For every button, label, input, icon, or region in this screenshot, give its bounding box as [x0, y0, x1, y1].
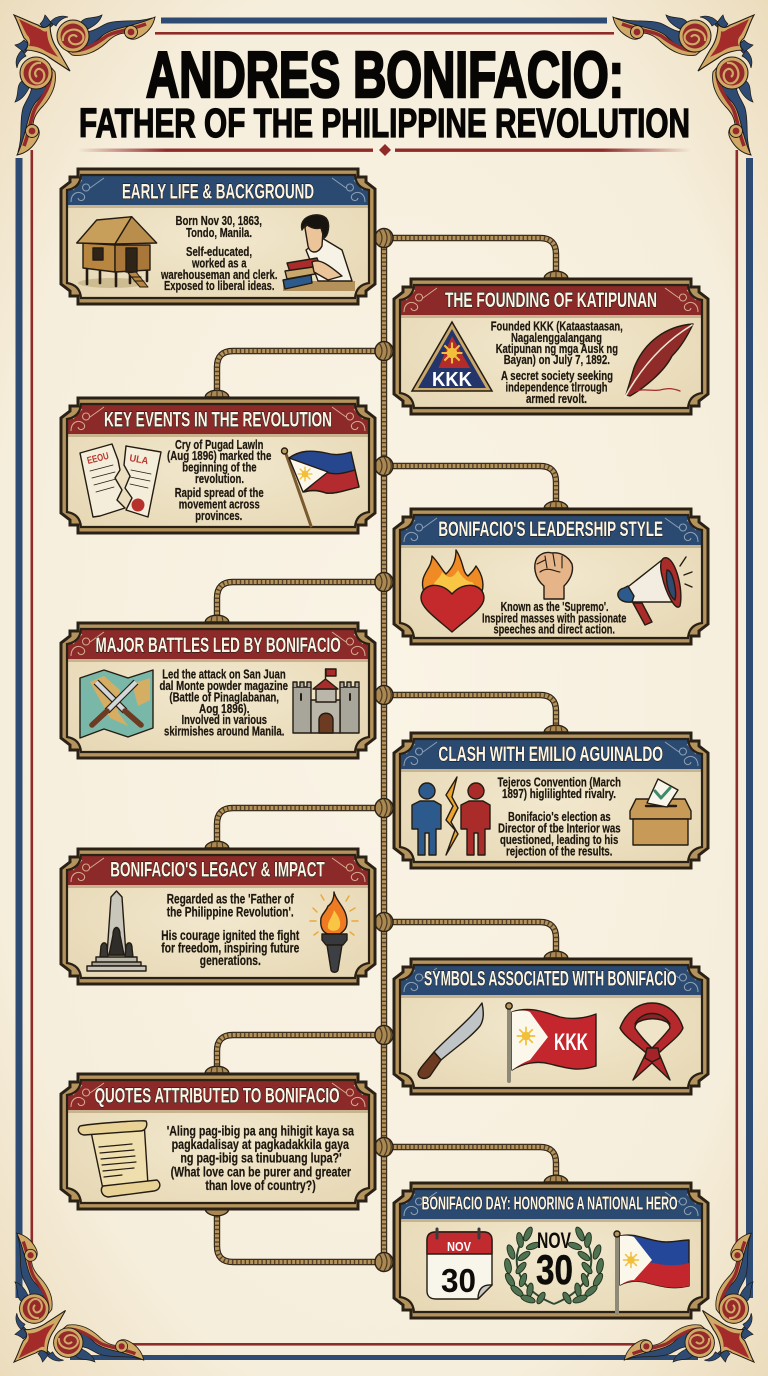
icon: quill feather: [625, 324, 693, 397]
text: founding of Katipunan: Bayan) on July 7, 1892.: [504, 353, 610, 367]
corner ornament: top left: [14, 15, 155, 155]
icon: torch: [310, 892, 358, 972]
panel: Bonifacio Day: [393, 1182, 709, 1318]
icon: map with crossed knives: [80, 670, 153, 738]
text: quote: ng pag-ibig sa tinubuang lupa?': [180, 1151, 342, 1166]
icon: nipa hut: [77, 217, 157, 288]
text: clash with Aguinaldo: Bonifacio's election as: [508, 810, 611, 824]
heading: founding of Katipunan: THE FOUNDING OF KATIPUNAN: [445, 288, 657, 312]
text: legacy and impact: for freedom, inspiring future: [161, 941, 300, 956]
corner ornament: bottom right: [624, 1233, 754, 1362]
text: legacy and impact: the Philippine Revolution'.: [167, 904, 294, 919]
text: early life: Exposed to liberal ideas.: [164, 279, 274, 293]
heading: key events: KEY EVENTS IN THE REVOLUTION: [104, 408, 332, 432]
text: legacy and impact: generations.: [200, 953, 261, 968]
text: clash with Aguinaldo: Tejeros Convention (March: [498, 776, 621, 790]
icon: torn document: EEOU: [86, 451, 110, 467]
heading: quotes: QUOTES ATTRIBUTED TO BONIFACIO: [95, 1084, 340, 1108]
icon: bolo knife: [418, 1003, 483, 1078]
icon: KKK triangle: [412, 322, 492, 391]
text: key events: provinces.: [195, 509, 242, 523]
icon: calendar: [427, 1229, 492, 1299]
icon: flaming heart: [421, 550, 484, 632]
text: clash with Aguinaldo: questioned, leading to his: [500, 833, 618, 847]
text: major battles: skirmishes around Manila.: [164, 725, 284, 739]
text: early life: Tondo, Manila.: [186, 226, 252, 240]
icon: raised fist: [535, 553, 573, 599]
text: early life: worked as a: [191, 256, 247, 270]
corner ornament: bottom left: [14, 1233, 144, 1362]
text: founding of Katipunan: A secret society seeking: [501, 369, 613, 383]
text: founding of Katipunan: Nagalenggalangang: [511, 331, 602, 345]
title: [79, 38, 690, 146]
text: clash with Aguinaldo: 1897) higlilighted rivalry.: [502, 787, 616, 801]
icon: two rivals with lightning: [412, 777, 490, 855]
text: legacy and impact: His courage ignited the fight: [161, 928, 300, 943]
icon: castle: [293, 669, 359, 733]
text: major battles: (Battle of Pinaglabanan,: [169, 691, 279, 705]
icon: laurel wreath: [503, 1226, 605, 1305]
panel: early life: [60, 168, 376, 304]
icon: KKK flag: KKK: [554, 1029, 588, 1056]
text: leadership style: speeches and direct action.: [494, 623, 615, 637]
text: major battles: dal Monte powder magazine: [160, 679, 288, 693]
icon: megaphone: [618, 557, 692, 625]
icon: man reading: [283, 215, 355, 291]
icon: KKK flag: [506, 1003, 596, 1081]
text: founding of Katipunan: Katipunan ng mga Ausk ng: [496, 342, 618, 356]
icon: calendar: 30: [441, 1262, 476, 1299]
icon: torn document: ULA: [128, 453, 149, 467]
panel: quotes: [60, 1073, 376, 1209]
panel: founding of Katipunan: [393, 278, 709, 414]
text: leadership style: [482, 600, 626, 637]
text: leadership style: Known as the 'Supremo'.: [501, 600, 609, 614]
text: key events: beginning of the: [182, 460, 257, 474]
text: quote: 'Aling pag-ibig pa ang hihigit kaya sa: [167, 1124, 354, 1139]
icon: parchment scroll: [78, 1121, 160, 1197]
heading: major battles: MAJOR BATTLES LED BY BONIFACIO: [96, 633, 341, 657]
text: quote: [167, 1124, 354, 1193]
text: major battles: [160, 667, 288, 739]
icon: Philippine flag on pole: [614, 1231, 689, 1313]
text: key events: revolution.: [195, 472, 244, 486]
icon: red neckerchief: [620, 1003, 683, 1080]
heading: legacy and impact: BONIFACIO'S LEGACY & IMPACT: [110, 858, 325, 882]
text: quote: pagkadalisay at pagkadakkila gaya: [172, 1137, 349, 1152]
icon: Philippine flag: [282, 448, 359, 526]
icon: calendar: NOV: [447, 1239, 471, 1254]
icon: Bonifacio monument: [87, 891, 146, 971]
panel: leadership style: [393, 508, 709, 644]
text: key events: Cry of Pugad Lawln: [175, 438, 263, 452]
text: clash with Aguinaldo: [498, 776, 621, 858]
corner ornament: top right: [613, 15, 754, 155]
text: quote: than love of country?): [205, 1178, 316, 1193]
panel: symbols: [393, 958, 709, 1094]
text: early life: [160, 214, 278, 293]
text: clash with Aguinaldo: Director of tbe Interior was: [498, 821, 621, 835]
panel: major battles: [60, 622, 376, 758]
text: major battles: Involved in various: [182, 713, 267, 727]
text: major battles: Aog 1896).: [199, 702, 250, 716]
text: major battles: Led the attack on San Juan: [162, 667, 286, 681]
text: quote: (What love can be purer and greater: [171, 1164, 352, 1179]
icon: laurel wreath: NOV: [537, 1228, 571, 1253]
icon: KKK triangle: KKK: [432, 369, 473, 391]
text: leadership style: Inspired masses with passionate: [482, 611, 626, 625]
text: early life: Born Nov 30, 1863,: [176, 214, 262, 228]
panel: key events: [60, 397, 376, 533]
panel: legacy and impact: [60, 848, 376, 984]
text: legacy and impact: [161, 892, 300, 968]
icon: torn document: [80, 444, 161, 517]
text: clash with Aguinaldo: rejection of the results.: [506, 844, 612, 858]
text: founding of Katipunan: armed revolt.: [526, 392, 587, 406]
icon: laurel wreath: 30: [536, 1246, 573, 1293]
heading: early life: EARLY LIFE & BACKGROUND: [122, 180, 314, 204]
text: early life: warehouseman and clerk.: [160, 268, 278, 282]
rope timeline connector: [205, 228, 568, 1272]
text: founding of Katipunan: [491, 320, 623, 406]
text: key events: (Aug 1896) marked the: [167, 449, 271, 463]
icon: ballot box: [630, 779, 691, 845]
panel: clash with Aguinaldo: [393, 732, 709, 868]
text: founding of Katipunan: independence tlrrough: [506, 381, 608, 395]
text: legacy and impact: Regarded as the 'Father of: [167, 892, 294, 907]
text: founding of Katipunan: Founded KKK (Kataastaasan,: [491, 320, 623, 334]
text: early life: Self-educated,: [186, 245, 252, 259]
title divider: [78, 144, 691, 156]
text: key events: movement across: [179, 497, 260, 511]
text: key events: Rapid spread of the: [175, 486, 264, 500]
text: key events: [167, 438, 271, 523]
